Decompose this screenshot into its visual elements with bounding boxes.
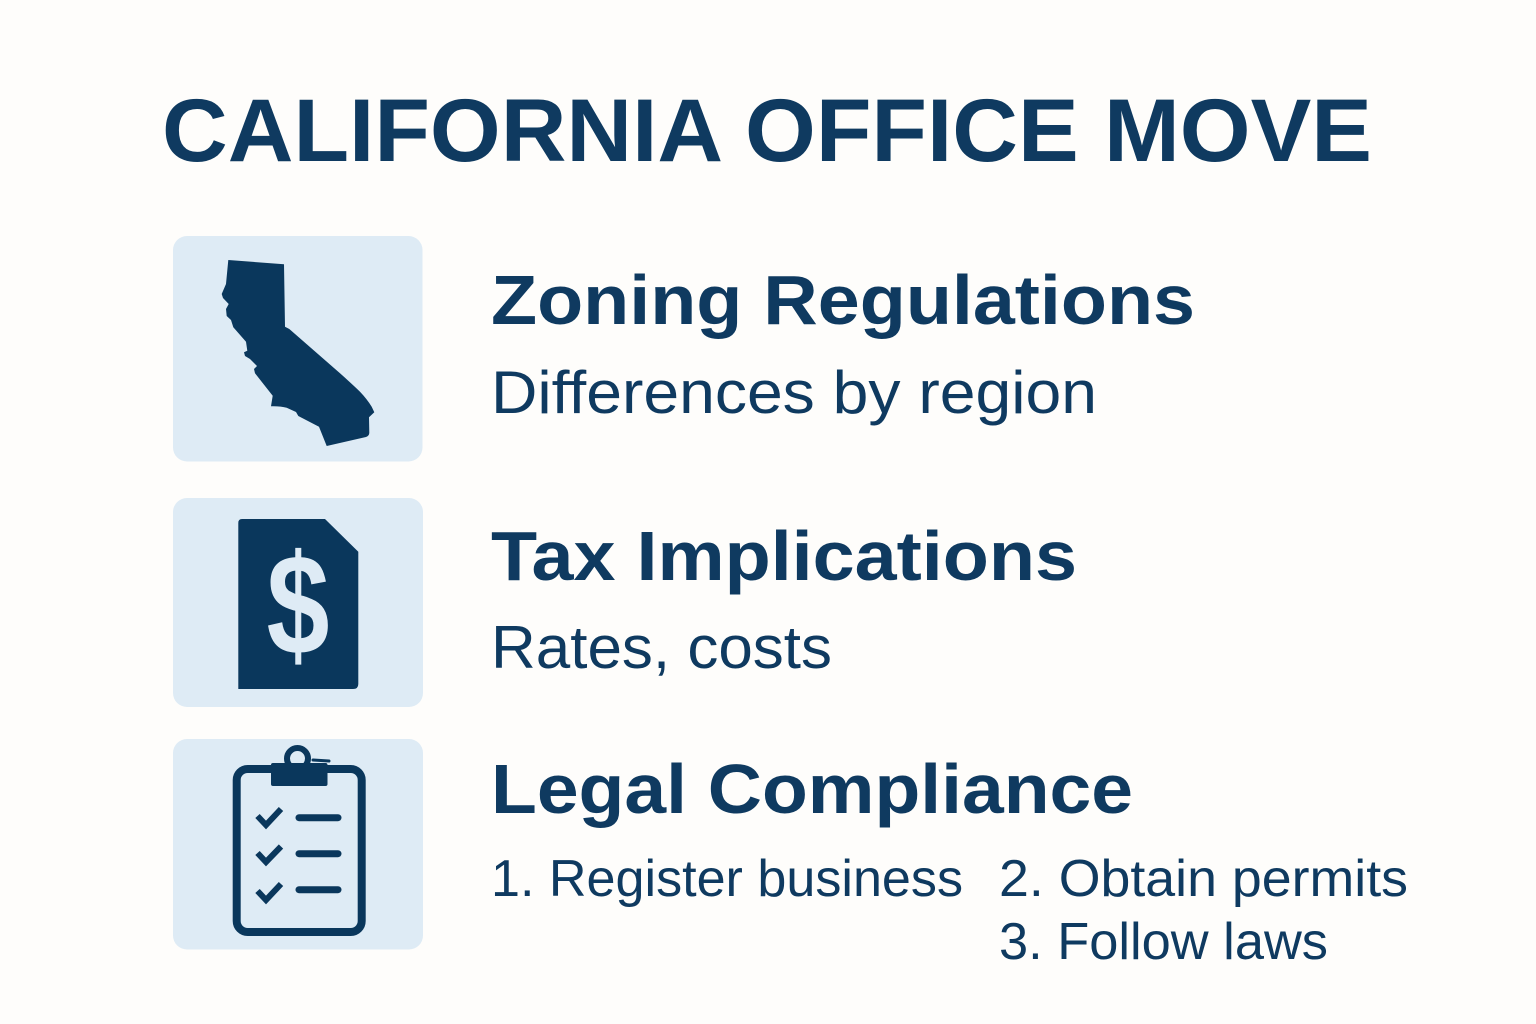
heading: tax implications: Tax Implications bbox=[491, 517, 1077, 595]
text: rates, costs: Rates, costs bbox=[491, 614, 832, 681]
icon tile: legal bbox=[173, 739, 423, 950]
panel: zoning regulations bbox=[173, 236, 1195, 462]
icon tile: tax bbox=[173, 498, 423, 707]
icon: california map bbox=[222, 260, 374, 446]
icon: dollar document: $ bbox=[267, 525, 329, 685]
list item 2: 2. Obtain permits bbox=[999, 850, 1408, 908]
panel: legal compliance bbox=[173, 739, 1408, 971]
heading: legal compliance: Legal Compliance bbox=[491, 750, 1133, 828]
panel: tax implications bbox=[173, 498, 1077, 707]
title: CALIFORNIA OFFICE MOVE bbox=[162, 80, 1372, 180]
icon tile: california bbox=[173, 236, 422, 462]
icon: clipboard checklist bbox=[237, 748, 362, 932]
icon: dollar document bbox=[238, 519, 358, 689]
text: differences by region: Differences by region bbox=[491, 359, 1097, 426]
list item 3: 3. Follow laws bbox=[999, 913, 1328, 971]
heading: zoning regulations: Zoning Regulations bbox=[491, 261, 1195, 339]
list item 1: 1. Register business bbox=[491, 850, 963, 908]
